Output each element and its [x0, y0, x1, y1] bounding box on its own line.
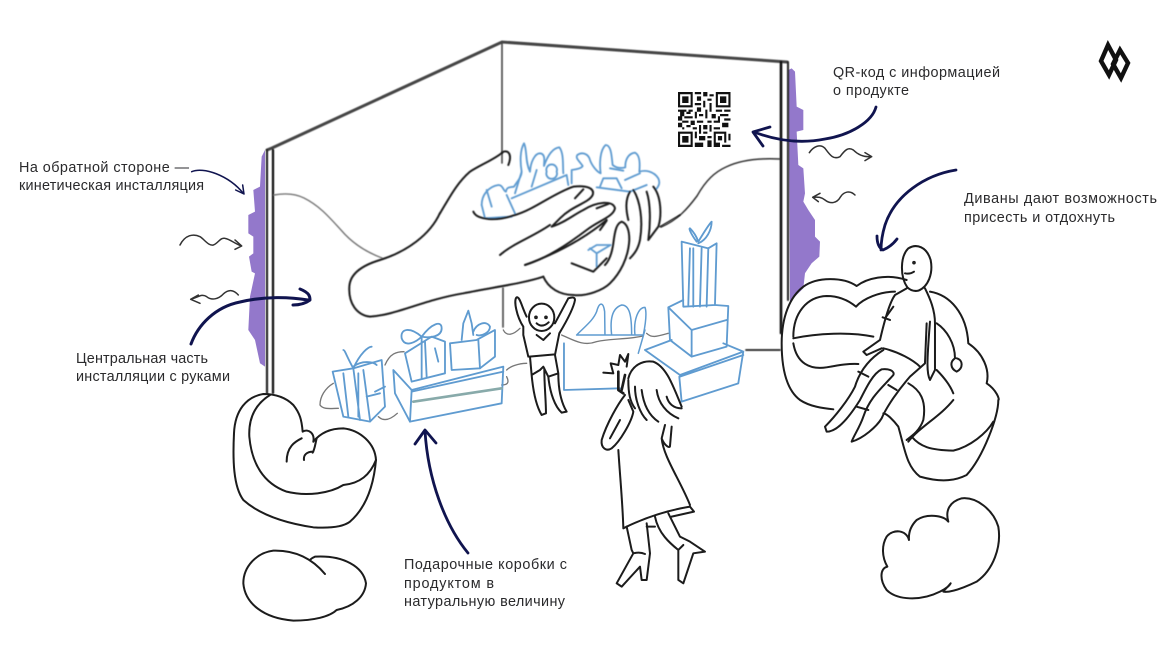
fingers and palm — [440, 151, 680, 295]
wavy air arrows right — [809, 146, 872, 203]
hand illustration: arm and hands with products — [349, 143, 680, 317]
arrow: to QR code — [753, 107, 876, 146]
icon: company logo — [1101, 45, 1128, 78]
gift boxes, bags and products in blue — [320, 222, 743, 422]
platform with gift and bag — [393, 311, 503, 422]
left floor cushion — [243, 551, 366, 621]
central wall frame — [267, 42, 788, 393]
text: kinetic installation label: На обратной стороне — — [19, 160, 190, 176]
arrow: to gift boxes — [415, 430, 468, 553]
text: QR code label: о продукте — [833, 83, 909, 99]
seated person on sofa — [825, 246, 935, 442]
panel: right kinetic wall edge in purple — [788, 68, 820, 302]
wavy air arrows left — [180, 235, 242, 303]
arrow: to kinetic installation — [192, 170, 244, 194]
products held in hands — [482, 143, 659, 267]
text: sofas label: присесть и отдохнуть — [964, 210, 1115, 226]
text: QR code label: QR-код с информацией — [833, 65, 1000, 81]
right floor cushion — [881, 498, 999, 598]
left armchair — [233, 394, 376, 528]
arrow: to sofas — [877, 170, 956, 250]
text: central part label: инсталляции с руками — [76, 369, 230, 385]
arrow: to central part with hands — [191, 289, 310, 344]
arm — [349, 213, 543, 317]
text: sofas label: Диваны дают возможность — [964, 191, 1157, 207]
gray cloud outlines behind boxes — [320, 328, 668, 420]
text: central part label: Центральная часть — [76, 351, 208, 367]
text: gift boxes label: Подарочные коробки с — [404, 557, 567, 573]
gift box one — [333, 347, 385, 422]
child hanging from hands — [515, 297, 575, 415]
girl with crown seen from behind — [602, 354, 705, 587]
panel: left kinetic wall edge in purple — [248, 150, 265, 367]
QR code — [678, 92, 730, 147]
text: gift boxes label: продуктом в — [404, 576, 494, 592]
right sofa — [782, 277, 999, 480]
text: gift boxes label: натуральную величину — [404, 594, 566, 610]
basket of products — [564, 304, 646, 390]
gift tower — [645, 222, 743, 402]
text: kinetic installation label: кинетическая инсталляция — [19, 178, 204, 194]
